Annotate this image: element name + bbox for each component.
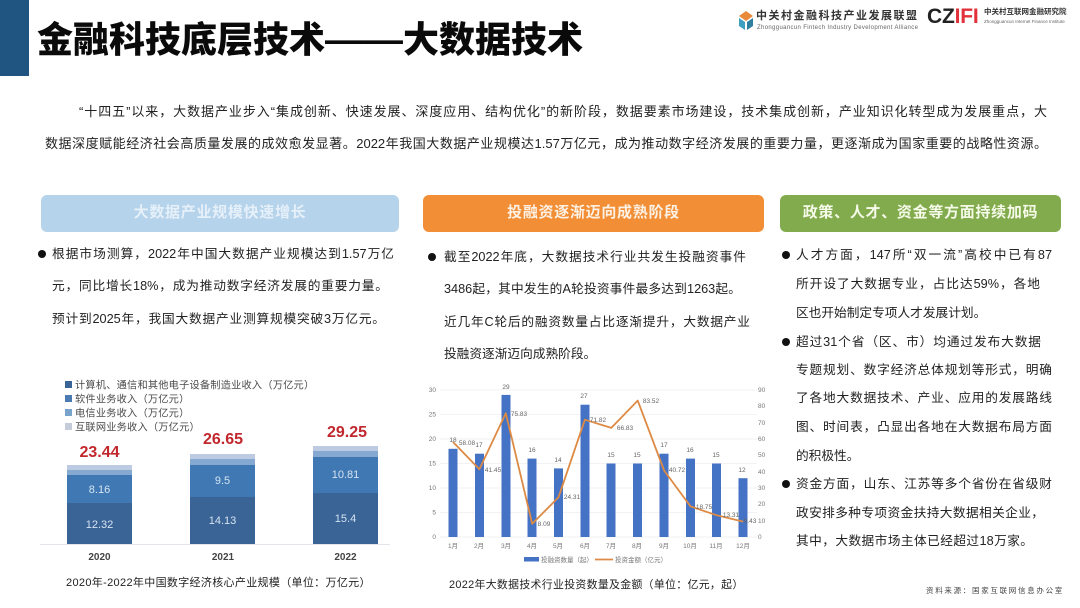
chart legend: [524, 555, 667, 564]
line data labels: 8.09: [538, 521, 551, 528]
line data labels: 18.75: [696, 504, 713, 511]
text block: investment events: 投融资逐渐迈向成熟阶段。: [444, 347, 596, 361]
totals: 29.25: [327, 424, 367, 441]
alliance name: 中关村金融科技产业发展联盟: [756, 10, 918, 22]
chart legend: [65, 378, 314, 434]
right axis: 80: [758, 403, 766, 410]
line data labels: 83.52: [643, 398, 660, 405]
text block: policy details: 的积极性。: [796, 449, 859, 463]
year labels: 2021: [212, 552, 235, 563]
bars: deal count: [448, 395, 748, 537]
chart legend: 投资金额（亿元）: [615, 555, 667, 564]
caption: left chart: 2020年-2022年中国数字经济核心产业规模（单位：万亿元）: [66, 577, 371, 589]
baseline: [40, 544, 390, 546]
bar data labels: 18: [449, 437, 457, 444]
text block: policy details: 图、时间表，凸显出各地在大数据布局方面: [796, 420, 1052, 434]
text block: investment events: 近几年C轮后的融资数量占比逐渐提升，大数据产业: [444, 315, 750, 329]
month labels: 4月: [527, 542, 537, 550]
bar 2022: [313, 446, 378, 544]
chart legend: 软件业务收入（万亿元）: [75, 392, 189, 406]
right axis: 60: [758, 436, 766, 443]
left axis: 0: [432, 534, 436, 541]
bar 2021: [190, 454, 255, 544]
right axis: 30: [758, 485, 766, 492]
month labels: 12月: [736, 542, 750, 550]
line data labels: 13.31: [723, 512, 740, 519]
line data labels: 58.08: [459, 440, 476, 447]
text block: policy details: 其中，大数据市场主体已经超过18万家。: [796, 534, 1033, 548]
right axis: 40: [758, 469, 766, 476]
month labels: 5月: [553, 542, 563, 550]
right axis: 20: [758, 501, 766, 508]
institute english name: Zhongguancun Internet Finance Institute: [984, 19, 1065, 24]
chart legend: 电信业务收入（万亿元）: [75, 406, 189, 420]
bar data labels: 16: [528, 447, 536, 454]
heading: investment: [423, 195, 764, 232]
right axis: 70: [758, 420, 766, 427]
month labels: 8月: [632, 542, 642, 550]
text block: market size: 根据市场测算，2022年中国大数据产业规模达到1.57万亿: [52, 247, 394, 261]
heading: policy: [780, 195, 1061, 232]
bar data labels: 12: [738, 467, 746, 474]
year labels: [88, 552, 357, 563]
totals: 23.44: [79, 444, 120, 461]
bar data labels: 27: [580, 393, 588, 400]
month labels: 2月: [474, 542, 484, 550]
stacked bar chart: core industry scale: [40, 378, 390, 563]
bar data labels: 15: [607, 452, 615, 459]
chart legend: 计算机、通信和其他电子设备制造业收入（万亿元）: [75, 378, 314, 392]
text block: policy details: 资金方面，山东、江苏等多个省份在省级财: [796, 477, 1052, 491]
month labels: 3月: [501, 542, 511, 550]
month labels: 10月: [683, 542, 697, 550]
text block: policy details: 超过31个省（区、市）均通过发布大数据: [796, 335, 1041, 349]
text block: market size: [38, 247, 394, 326]
right axis: 10: [758, 518, 766, 525]
icon: alliance logo: [739, 11, 753, 30]
bar 2020: 8.16: [89, 484, 110, 496]
chart legend: 投融资数量（起）: [541, 555, 593, 564]
right axis: [758, 387, 766, 541]
left axis: 20: [429, 436, 436, 443]
heading: policy: 政策、人才、资金等方面持续加码: [803, 204, 1038, 221]
text block: investment events: [428, 250, 750, 361]
text block: policy details: 了各地大数据技术、产业、应用的发展路线: [796, 391, 1052, 405]
text block: policy details: [782, 248, 1052, 548]
bar data labels: 14: [554, 457, 562, 464]
heading: big data growth: [41, 195, 399, 232]
month labels: 11月: [709, 542, 723, 550]
left axis: 25: [429, 412, 436, 418]
line data labels: 9.43: [744, 518, 757, 525]
line data labels: 40.72: [669, 467, 686, 474]
title: ——: [325, 19, 403, 60]
bar 2020: 12.32: [86, 519, 113, 531]
left axis: 30: [429, 387, 436, 394]
text block: market size: 预计到2025年，我国大数据产业测算规模突破3万亿元。: [52, 312, 385, 326]
bar data labels: 15: [712, 452, 720, 459]
year labels: 2022: [334, 552, 357, 563]
month labels: [448, 542, 750, 550]
text block: market size: 元，同比增长18%，成为推动数字经济发展的重要力量。: [52, 279, 388, 293]
month labels: 7月: [606, 542, 616, 550]
line data labels: 41.45: [485, 467, 502, 474]
text block: investment events: 3486起，其中发生的A轮投资事件最多达到1263起。: [444, 282, 741, 296]
bar 2020: [67, 465, 132, 544]
bar data labels: 16: [686, 447, 694, 454]
line data labels: 24.31: [564, 494, 581, 501]
bar data labels: 17: [660, 442, 668, 449]
logos: [739, 5, 1066, 31]
totals: [79, 424, 367, 461]
chart legend: 互联网业务收入（万亿元）: [75, 420, 200, 434]
right axis: 0: [758, 534, 762, 541]
text block: policy details: 人才方面，147所“双一流”高校中已有87: [796, 248, 1052, 262]
heading: big data growth: 大数据产业规模快速增长: [134, 204, 306, 221]
bar data labels: [449, 384, 746, 474]
bar 2022: 10.81: [332, 469, 359, 481]
month labels: 1月: [448, 542, 458, 550]
alliance english name: Zhongguancun Fintech Industry Development Alliance: [757, 25, 918, 31]
bar 2022: 15.4: [335, 513, 356, 525]
line data labels: 66.83: [617, 425, 634, 432]
combo chart: monthly investment: [429, 384, 766, 564]
intro paragraph: 数据深度赋能经济社会高质量发展的成效愈发显著。2022年我国大数据产业规模达1.57万亿元，成为推动数字经济发展的重要力量，更逐渐成为国家重要的战略性资源。: [45, 136, 1047, 151]
line data labels: 75.83: [511, 411, 528, 418]
caption: middle chart: 2022年大数据技术行业投资数量及金额（单位：亿元，起）: [449, 579, 744, 591]
left axis: 10: [429, 485, 436, 492]
grid lines: [440, 390, 757, 537]
text block: policy details: 政安排多种专项资金扶持大数据相关企业，: [796, 506, 1044, 520]
text block: investment events: 截至2022年底，大数据技术行业共发生投融资事件: [444, 250, 746, 264]
CZIFI logo: CZIFI: [927, 5, 978, 28]
intro paragraph: “十四五”以来，大数据产业步入“集成创新、快速发展、深度应用、结构优化”的新阶段，数据要素市场建设，技术集成创新，产业知识化转型成为发展重点，大: [79, 104, 1047, 119]
line data labels: 71.82: [590, 417, 607, 424]
bar data labels: 29: [502, 384, 510, 391]
corner accent block: [0, 0, 29, 76]
totals: 26.65: [203, 431, 243, 448]
bar 2021: 9.5: [215, 475, 230, 487]
right axis: 50: [758, 452, 766, 459]
text block: policy details: 专题规划、数字经济总体规划等形式，明确: [796, 363, 1052, 377]
bar data labels: 15: [633, 452, 641, 459]
text block: policy details: 区也开始制定专项人才发展计划。: [796, 306, 986, 320]
bar 2021: 14.13: [209, 515, 236, 527]
left axis: [429, 387, 436, 541]
heading: investment: 投融资逐渐迈向成熟阶段: [507, 204, 680, 221]
text block: policy details: 所开设了大数据专业，占比达59%，各地: [796, 277, 1040, 291]
left axis: 15: [429, 460, 436, 468]
right axis: 90: [758, 387, 766, 394]
institute name: 中关村互联网金融研究院: [984, 7, 1066, 16]
intro paragraph: [45, 104, 1047, 151]
year labels: 2020: [88, 552, 111, 563]
left axis: 5: [432, 510, 436, 516]
month labels: 6月: [580, 542, 590, 550]
month labels: 9月: [659, 542, 669, 550]
line data labels: [459, 398, 757, 528]
line: investment amount: [453, 401, 743, 524]
title: 金融科技底层技术 大数据技术: [37, 19, 583, 60]
source note: 资料来源：国家互联网信息办公室: [926, 586, 1064, 595]
bar data labels: 17: [475, 442, 483, 449]
